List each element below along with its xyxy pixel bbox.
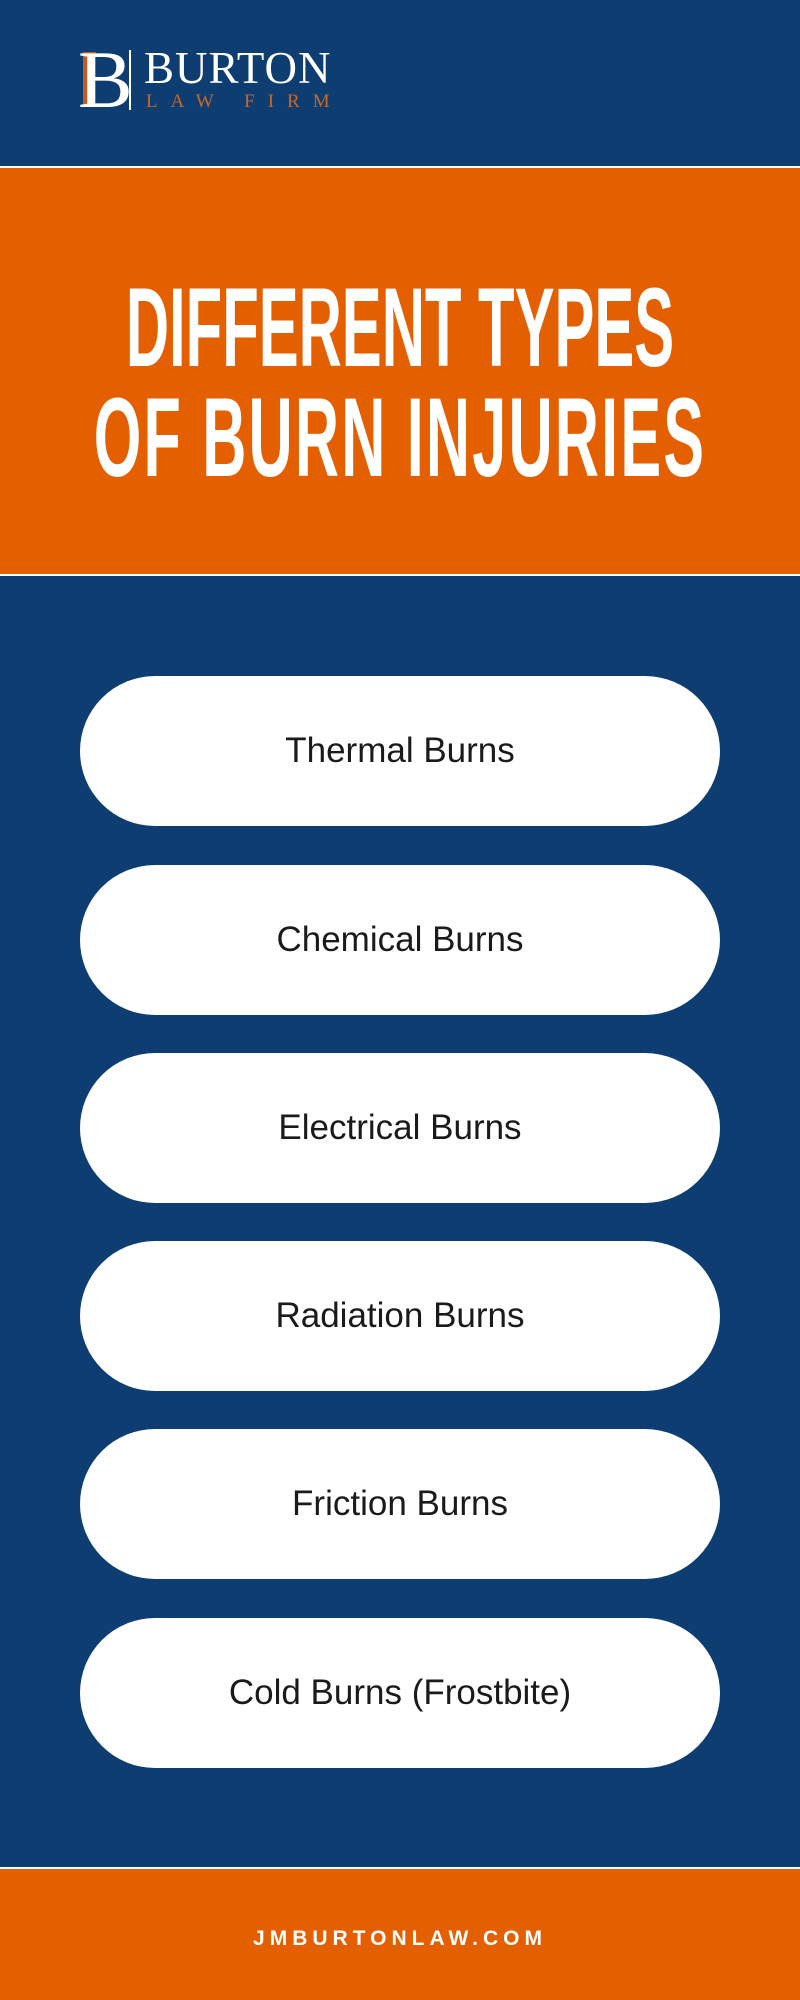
pill: Radiation Burns	[80, 1241, 720, 1391]
title	[94, 265, 706, 500]
icon: B with pillar: B	[78, 34, 133, 125]
logo text: LAW FIRM: LAW FIRM	[146, 91, 343, 112]
pill: Thermal Burns: Thermal Burns	[285, 731, 515, 770]
pill: Friction Burns	[80, 1429, 720, 1579]
title band	[0, 168, 800, 574]
pill: Chemical Burns: Chemical Burns	[276, 920, 524, 959]
footer url: JMBURTONLAW.COM	[253, 1927, 547, 1950]
pill: Radiation Burns: Radiation Burns	[275, 1296, 525, 1335]
pill: Cold Burns	[80, 1618, 720, 1768]
pill: Chemical Burns	[80, 865, 720, 1015]
header band	[0, 0, 800, 166]
pill: Friction Burns: Friction Burns	[292, 1484, 508, 1523]
logo text: BURTON: BURTON	[144, 43, 332, 93]
pill: Thermal Burns	[80, 676, 720, 826]
pill: Electrical Burns	[80, 1053, 720, 1203]
title: OF BURN INJURIES	[94, 375, 706, 500]
logo	[78, 34, 343, 125]
pill: Electrical Burns: Electrical Burns	[278, 1108, 522, 1147]
title: DIFFERENT TYPES	[126, 265, 674, 390]
pill: Cold Burns: Cold Burns (Frostbite)	[229, 1673, 571, 1712]
footer	[0, 1869, 800, 2000]
